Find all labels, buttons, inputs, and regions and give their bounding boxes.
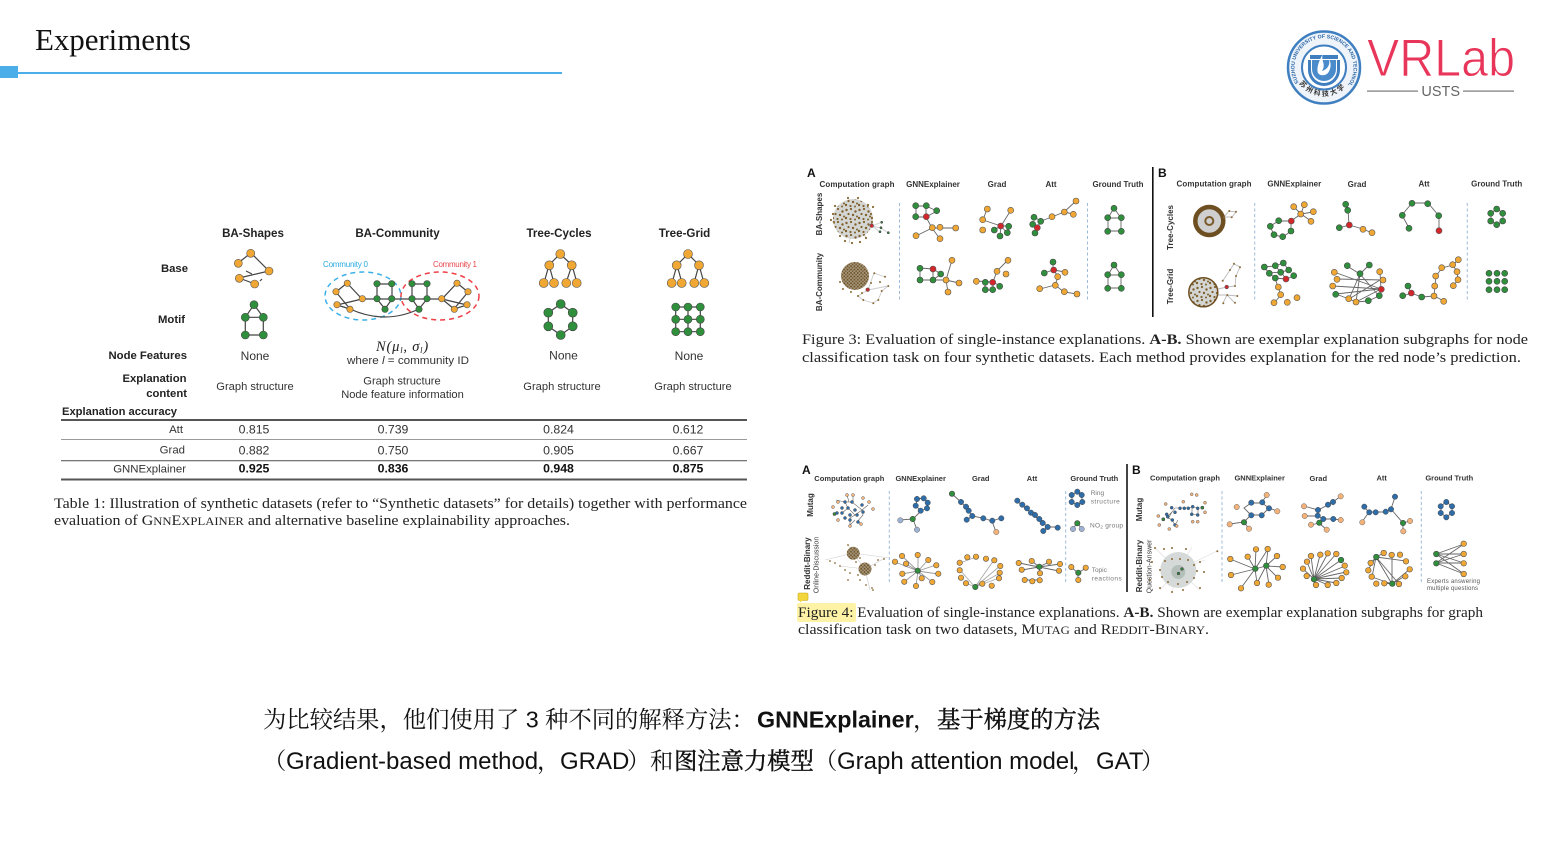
panel headings A: GNNExplainer [906, 180, 960, 189]
graph: BA-Community Att [1037, 259, 1080, 297]
panel headings B: Reddit-Binary [1135, 539, 1144, 592]
panel headings B: B [1132, 463, 1141, 477]
graph: BA-Shapes motif [241, 301, 267, 339]
accuracy table rows: 0.824 [543, 422, 574, 436]
figure 4 caption: classification task on two datasets, M UTAG and REDDIT-BINARY. [798, 622, 1209, 638]
graph: Mutag computation graph B [1157, 493, 1206, 530]
panel headings B [1158, 166, 1522, 304]
node features and explanation content: Graph structure [216, 381, 294, 393]
bottom text: comparison methods [263, 706, 1164, 775]
accuracy table rows: 0.882 [239, 444, 270, 458]
accuracy table rows: 0.948 [543, 462, 574, 476]
figure 3 caption: Figure 3: Evaluation of single-instance explanations. A-B. Shown are exemplar explanation subgraphs for node [802, 332, 1528, 348]
bottom text: comparison methods: GAT [1096, 748, 1144, 775]
table caption [54, 496, 747, 529]
accuracy table rows: 0.925 [239, 462, 270, 476]
graph: Tree-Cycles computation graph [1195, 207, 1237, 235]
table column headings: Tree-Grid [659, 227, 710, 240]
graph: Mutag ground truth A: Ring [1091, 490, 1104, 497]
graph: BA-Shapes base [234, 249, 273, 288]
panel headings A: Computation graph [814, 474, 885, 483]
bottom text: comparison methods: ） [1141, 748, 1164, 774]
panel headings A: BA-Community [815, 252, 824, 311]
panel headings A: A [802, 463, 811, 477]
panel headings B: Computation graph [1150, 474, 1220, 482]
panel headings B: Computation graph [1176, 180, 1252, 188]
panel headings A: BA-Shapes [815, 192, 824, 235]
table caption: Table 1: Illustration of synthetic datasets (refer to “Synthetic datasets” for details) together with performance [54, 496, 747, 512]
node features and explanation content: ) [422, 339, 429, 355]
graph: BA-Shapes ground truth [1105, 205, 1124, 234]
panel headings A: Computation graph [820, 180, 895, 189]
community labels: Community 1 [433, 260, 478, 269]
community labels: Community 0 [323, 260, 369, 269]
panel headings B [1132, 463, 1474, 593]
bottom text: comparison methods: ） [627, 748, 650, 774]
panel headings B: Question-Answer [1146, 539, 1154, 593]
logo wordmark: VRLab [1367, 29, 1515, 88]
bottom text: comparison methods: GNNExplainer [757, 706, 914, 732]
header rule [0, 66, 562, 78]
panel headings A: Att [1045, 180, 1057, 189]
graph: Mutag ground truth A: 2 [1100, 524, 1103, 530]
table column headings [222, 227, 710, 240]
accuracy table rows: GNNExplainer [113, 464, 186, 476]
panel headings A: A [807, 166, 816, 180]
node features and explanation content: N(μ [376, 339, 400, 355]
panel headings A [807, 166, 1144, 311]
table column headings: BA-Community [355, 227, 440, 240]
graph: Mutag ground truth B [1438, 499, 1455, 520]
node features and explanation content: l [420, 345, 423, 355]
graph: Mutag Grad B [1301, 494, 1343, 532]
graph: BA-Community ground truth [1105, 262, 1124, 291]
node features and explanation content: l [400, 345, 403, 355]
table caption: evaluation of G NNEXPLAINER and alternative baseline explainability approaches. [54, 513, 570, 529]
divider between A and B [1126, 464, 1128, 592]
graph: Reddit Grad B [1300, 550, 1349, 588]
table column headings: BA-Shapes [222, 227, 284, 240]
panel headings B: GNNExplainer [1267, 180, 1321, 188]
node features and explanation content: Node feature information [341, 389, 464, 401]
graph: BA-Community GNNExplainer [917, 257, 962, 295]
graph: Tree-Grid Grad [1330, 262, 1386, 305]
graph: Tree-Grid base [667, 250, 709, 288]
graph: BA-Shapes computation graph [830, 197, 889, 244]
bottom text: comparison methods: Gradient-based method [286, 748, 538, 775]
panel headings B: Grad [1348, 180, 1366, 189]
graph: BA-Community [323, 260, 479, 320]
graph: Reddit ground truth B [1427, 541, 1480, 592]
graph: Mutag computation graph A [832, 494, 874, 528]
panel headings A: Ground Truth [1092, 180, 1144, 189]
accuracy table rows: 0.750 [378, 444, 409, 458]
panel headings A: Grad [972, 474, 990, 483]
panel: figure 4 graph classification explanations [802, 463, 1480, 593]
graph: Reddit computation graph B [1149, 547, 1218, 593]
divider between A and B [1152, 167, 1154, 317]
graph: Reddit GNNExplainer A [892, 552, 941, 589]
graph: Reddit computation graph A [825, 544, 889, 591]
graph: Mutag ground truth A: NO [1090, 522, 1100, 530]
node features and explanation content: None [241, 349, 270, 363]
accuracy table rows: 0.612 [673, 422, 704, 436]
graph: Tree-Grid computation graph [1189, 263, 1241, 307]
node features and explanation content: Graph structure [363, 376, 441, 388]
graph: Tree-Cycles ground truth [1488, 206, 1506, 228]
accuracy table rows: 0.836 [378, 462, 409, 476]
table row labels: Motif [158, 314, 185, 326]
panel headings B: Tree-Grid [1166, 269, 1175, 304]
graph: Tree-Cycles motif [544, 300, 577, 340]
graph: Reddit Att B [1366, 550, 1412, 587]
table row labels: content [146, 388, 187, 400]
figure 4 caption [797, 593, 1483, 638]
graph: Reddit Grad A [957, 554, 1003, 590]
graph: Mutag GNNExplainer B [1227, 492, 1280, 531]
graph: Tree-Grid GNNExplainer [1261, 260, 1300, 306]
table row labels: Node Features [109, 350, 187, 362]
panel headings B: Att [1376, 474, 1387, 482]
panel headings A: Grad [988, 180, 1006, 189]
accuracy table rows: 0.815 [239, 422, 270, 436]
graph: Reddit ground truth B: multiple questions [1427, 586, 1478, 592]
panel headings A: GNNExplainer [895, 474, 946, 483]
node features and explanation content: where l = community ID [346, 355, 469, 367]
table row labels [62, 263, 188, 418]
bottom text: comparison methods: 图注意力模型 [674, 748, 814, 774]
logo subtitle USTS: USTS [1421, 84, 1460, 100]
table row labels: Explanation accuracy [62, 406, 178, 418]
graph: Reddit ground truth A: Topic [1092, 567, 1108, 574]
panel headings B: Ground Truth [1425, 474, 1474, 482]
panel: table 1 synthetic datasets [61, 227, 747, 480]
graph: Mutag ground truth A: structure [1091, 498, 1120, 506]
bottom text: comparison methods: ， [913, 706, 936, 734]
graph: Mutag Grad A [949, 491, 1004, 535]
panel headings A: Ground Truth [1070, 474, 1119, 483]
panel headings A: Online-Discussion [814, 537, 820, 593]
graph: Tree-Grid motif [672, 303, 704, 336]
panel headings B: Mutag [1135, 498, 1144, 521]
accuracy table rows: 0.905 [543, 444, 574, 458]
accuracy table rows: 0.667 [673, 444, 704, 458]
graph: Tree-Grid Att [1400, 257, 1461, 304]
accuracy table rows: Att [169, 424, 184, 436]
graph: Mutag GNNExplainer A [898, 496, 930, 532]
graph: BA-Shapes Grad [980, 206, 1014, 239]
graph: Mutag Att B [1360, 494, 1413, 534]
figure 3 caption: classification task on four synthetic datasets. Each method provides explanation for the red node’s prediction. [802, 350, 1521, 366]
bottom text: comparison methods: 基于梯度的方法 [937, 706, 1101, 732]
panel headings B: Tree-Cycles [1166, 204, 1175, 250]
graph: Mutag ground truth A: group [1103, 522, 1123, 530]
bottom text: comparison methods: （ [814, 748, 837, 774]
table row labels: Base [161, 263, 188, 275]
graph: BA-Shapes GNNExplainer [913, 203, 959, 242]
panel headings B: GNNExplainer [1234, 474, 1285, 482]
panel headings A: Att [1027, 474, 1038, 483]
node features and explanation content: , σ [403, 339, 420, 355]
icon: comment marker [798, 593, 808, 602]
graph: Reddit GNNExplainer B [1228, 546, 1285, 591]
panel headings B: Ground Truth [1471, 180, 1522, 188]
table row labels: Explanation [122, 373, 187, 385]
icon: university seal: 苏州科技大学 [1299, 80, 1344, 97]
graph: Tree-Cycles Att [1399, 200, 1442, 234]
graph: BA-Community computation graph [839, 262, 889, 304]
table column headings: Tree-Cycles [526, 227, 592, 240]
graph: Tree-Grid ground truth [1486, 270, 1508, 293]
graph: Mutag Att A [1015, 498, 1060, 534]
node features and explanation content: Graph structure [654, 381, 732, 393]
title: Experiments [35, 22, 191, 57]
accuracy table rows: 0.739 [378, 422, 409, 436]
graph: Tree-Cycles GNNExplainer [1267, 202, 1316, 240]
figure 4 caption: Figure 4: Evaluation of single-instance explanations. A-B. Shown are exemplar explanation subgraphs for graph [798, 605, 1483, 621]
bottom text: comparison methods: 和 [650, 748, 673, 774]
panel headings A: Mutag [806, 493, 815, 517]
graph: Mutag ground truth A [1069, 489, 1123, 532]
bottom text: comparison methods: ， [537, 748, 560, 775]
graph: BA-Community Grad [973, 257, 1011, 293]
bottom text: comparison methods: 为比较结果，他们使用了 3 种不同的解释方法： [263, 706, 755, 734]
bottom text: comparison methods: Graph attention model [837, 748, 1074, 775]
bottom text: comparison methods: （ [263, 748, 286, 774]
graph: Reddit Att A [1016, 558, 1063, 584]
accuracy table rows [61, 419, 747, 480]
panel headings B: Att [1418, 180, 1430, 188]
graph: Reddit ground truth B: Experts answering [1427, 579, 1480, 585]
accuracy table rows: Grad [160, 444, 185, 456]
node features and explanation content: None [675, 349, 704, 363]
graph: Reddit ground truth A [1069, 564, 1122, 583]
graph: Reddit ground truth A: reactions [1092, 576, 1122, 582]
graph: Tree-Cycles Grad [1336, 201, 1375, 236]
panel headings B: Grad [1310, 474, 1327, 483]
logo: university seal and VRLab [1286, 29, 1515, 105]
figure 3 caption [802, 332, 1528, 366]
node features and explanation content: None [549, 348, 578, 362]
panel: figure 3 node classification explanations [807, 166, 1522, 317]
bottom text: comparison methods: ， [1072, 748, 1095, 775]
bottom text: comparison methods: GRAD [560, 748, 629, 775]
graph: Tree-Cycles base [539, 250, 581, 288]
panel headings A [802, 463, 1119, 593]
node features and explanation content: Graph structure [523, 381, 601, 393]
community labels [323, 260, 478, 269]
accuracy table rows: 0.875 [673, 462, 704, 476]
icon: university seal [1286, 30, 1362, 105]
graph: BA-Shapes Att [1030, 198, 1079, 236]
panel headings B: B [1158, 166, 1167, 180]
node features and explanation content [216, 339, 732, 401]
panel headings A: Reddit-Binary [803, 537, 812, 590]
